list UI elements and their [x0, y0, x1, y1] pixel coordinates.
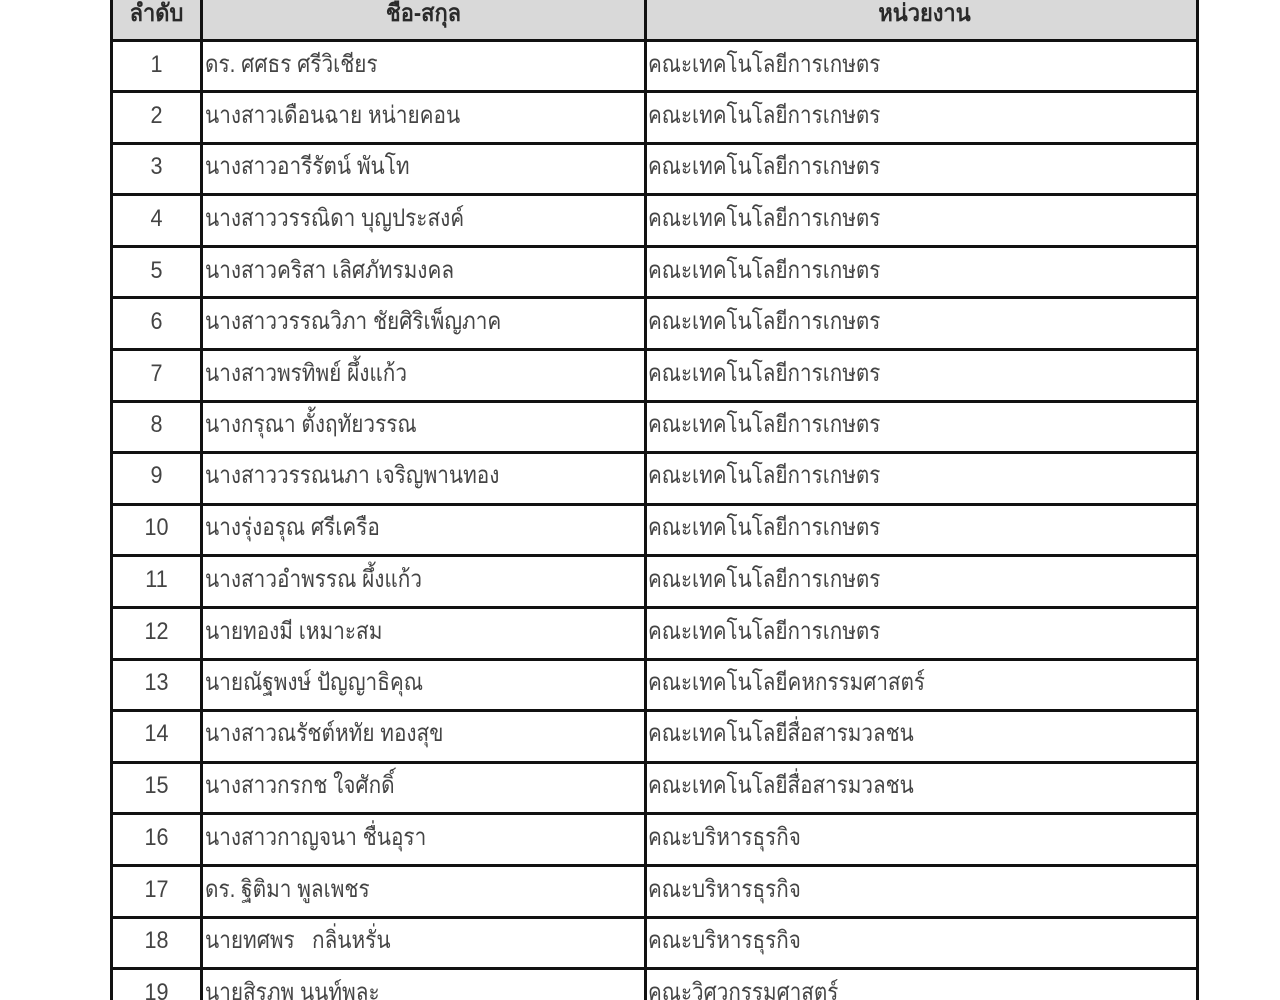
row 13 [144, 668, 925, 696]
row 5: 5 [150, 257, 163, 284]
row 7 [150, 356, 880, 387]
row 10: คณะเทคโนโลยีการเกษตร [648, 514, 880, 541]
row 5: คณะเทคโนโลยีการเกษตร [648, 257, 880, 284]
row 9 [150, 461, 880, 489]
row 15: คณะเทคโนโลยีสื่อสารมวลชน [648, 772, 914, 799]
header: order: ลำดับ [130, 0, 183, 27]
row 17: คณะบริหารธุรกิจ [648, 876, 801, 903]
row 17 [144, 876, 801, 904]
row 8: 8 [150, 411, 163, 438]
row 1: ดร. ศศธร ศรีวิเชียร [205, 51, 378, 78]
row 3: นางสาวอารีรัตน์ พันโท [205, 153, 410, 180]
row 4 [150, 204, 880, 232]
row 10: 10 [144, 514, 169, 541]
row 6: คณะเทคโนโลยีการเกษตร [648, 308, 880, 335]
row 6: นางสาววรรณวิภา ชัยศิริเพ็ญภาค [205, 308, 501, 335]
row 10: นางรุ่งอรุณ ศรีเครือ [205, 514, 380, 541]
row 18: คณะบริหารธุรกิจ [648, 927, 801, 954]
row 1: คณะเทคโนโลยีการเกษตร [648, 51, 880, 78]
row 19 [144, 979, 838, 1000]
row 11 [145, 562, 880, 593]
row 6: 6 [150, 308, 163, 335]
row 7: 7 [150, 360, 163, 387]
row 15: 15 [144, 772, 169, 799]
row 14: นางสาวณรัชต์หทัย ทองสุข [205, 720, 443, 747]
row 16: คณะบริหารธุรกิจ [648, 824, 801, 851]
row 8 [150, 406, 880, 438]
row 12: 12 [144, 618, 169, 645]
row 12: นายทองมี เหมาะสม [205, 618, 382, 645]
row 4: 4 [150, 205, 163, 232]
row 1: 1 [150, 51, 163, 78]
row 16 [144, 820, 801, 852]
row 11: 11 [145, 566, 168, 593]
row 9: คณะเทคโนโลยีการเกษตร [648, 462, 880, 489]
row 2: คณะเทคโนโลยีการเกษตร [648, 102, 880, 129]
row 9: 9 [150, 462, 163, 489]
row 13: 13 [144, 669, 169, 696]
row 4: คณะเทคโนโลยีการเกษตร [648, 205, 880, 232]
row 14: 14 [144, 720, 169, 747]
row 18 [144, 923, 801, 954]
row 12: คณะเทคโนโลยีการเกษตร [648, 618, 880, 645]
row 17: ดร. ฐิติมา พูลเพชร [205, 876, 370, 903]
row 5: นางสาวคริสา เลิศภัทรมงคล [205, 257, 454, 284]
row 10 [144, 513, 880, 542]
row 7: คณะเทคโนโลยีการเกษตร [648, 360, 880, 387]
row 3: คณะเทคโนโลยีการเกษตร [648, 153, 880, 180]
row 8: นางกรุณา ตั้งฤทัยวรรณ [205, 411, 417, 438]
row 18: นายทศพร กลิ่นหรั่น [205, 927, 391, 954]
row 2 [150, 101, 880, 129]
row 14: คณะเทคโนโลยีสื่อสารมวลชน [648, 720, 914, 747]
row 14 [144, 716, 914, 748]
table header [111, 0, 1198, 40]
row 4: นางสาววรรณิดา บุญประสงค์ [205, 205, 464, 232]
row 1 [150, 50, 880, 78]
header: department: หน่วยงาน [878, 0, 971, 27]
row 16: 16 [144, 824, 169, 851]
row 2: นางสาวเดือนฉาย หน่ายคอน [205, 102, 460, 129]
row 8: คณะเทคโนโลยีการเกษตร [648, 411, 880, 438]
row 9: นางสาววรรณนภา เจริญพานทอง [205, 462, 499, 489]
row 3 [150, 152, 880, 180]
row 2: 2 [150, 102, 163, 129]
row 13: คณะเทคโนโลยีคหกรรมศาสตร์ [648, 669, 925, 696]
row 17: 17 [144, 876, 169, 903]
row 5 [150, 256, 880, 284]
row 11: นางสาวอำพรรณ ผึ้งแก้ว [205, 566, 422, 593]
row 13: นายณัฐพงษ์ ปัญญาธิคุณ [205, 669, 423, 696]
row 18: 18 [144, 927, 169, 954]
row 6 [150, 306, 880, 335]
row 15: นางสาวกรกช ใจศักดิ์ [205, 772, 395, 799]
row 16: นางสาวกาญจนา ชื่นอุรา [205, 824, 426, 851]
row 11: คณะเทคโนโลยีการเกษตร [648, 566, 880, 593]
row 7: นางสาวพรทิพย์ ผึ้งแก้ว [205, 360, 407, 387]
row 3: 3 [150, 153, 163, 180]
row 12 [144, 617, 880, 645]
row 15 [144, 768, 914, 799]
header: name: ชื่อ-สกุล [386, 0, 461, 27]
